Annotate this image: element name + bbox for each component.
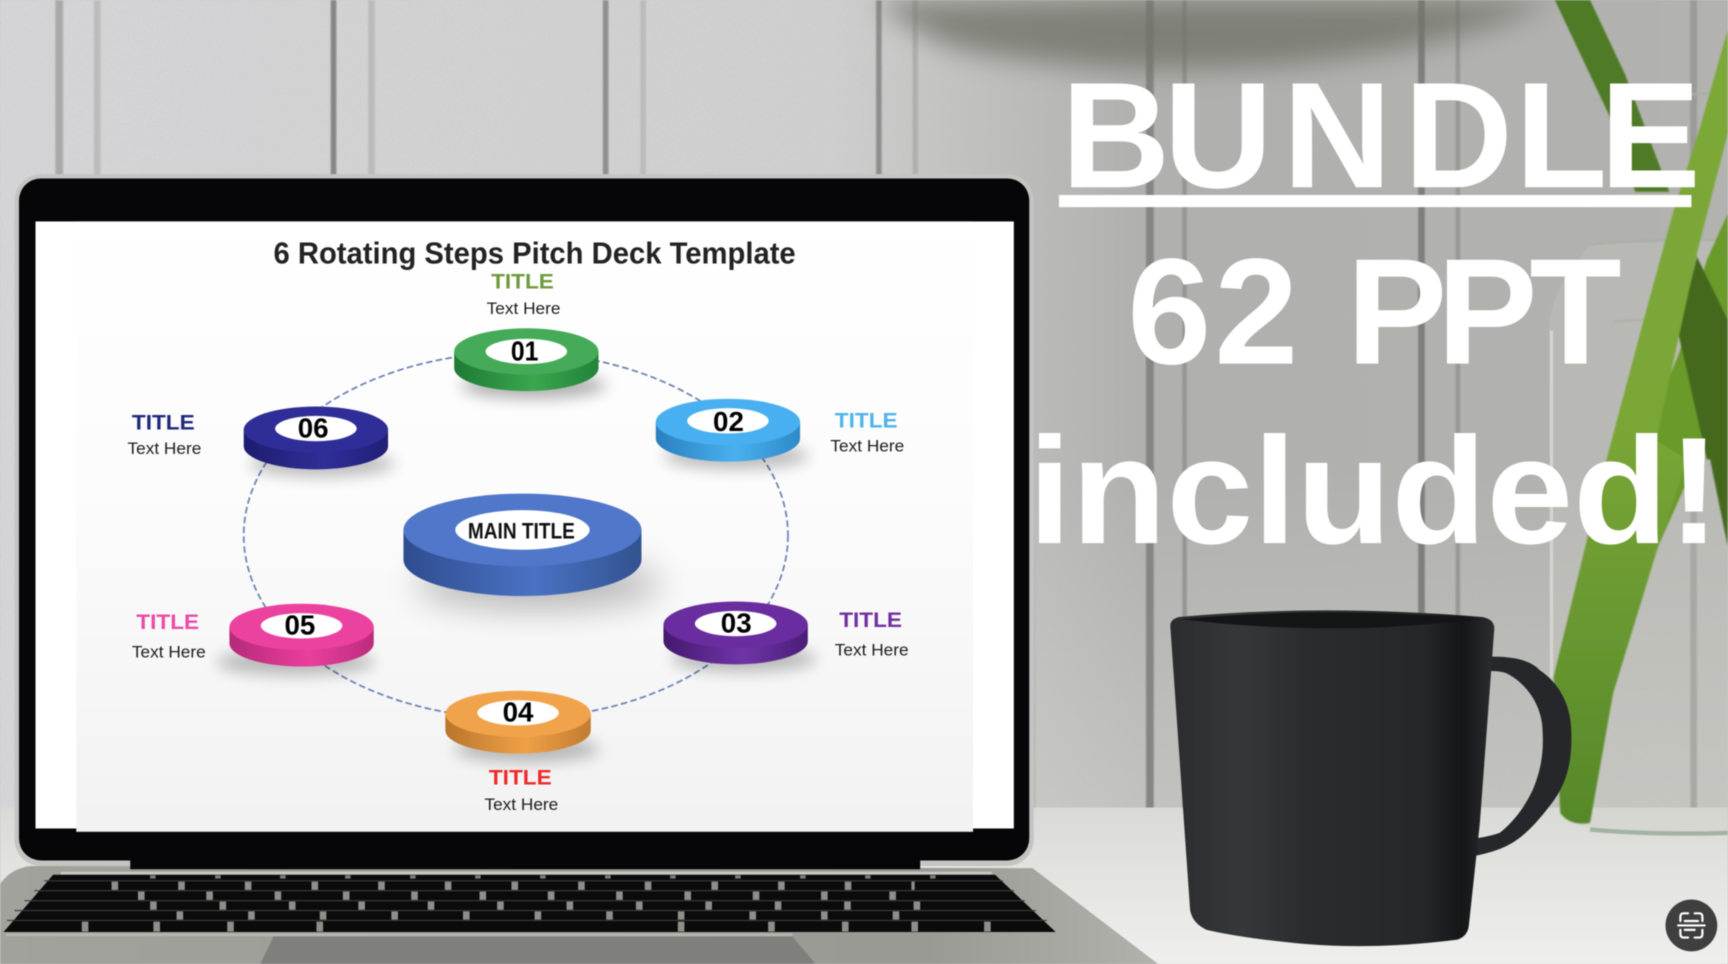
label: step 01 [487, 271, 560, 318]
step 03 disc: 03 [721, 607, 752, 638]
step 05 disc [216, 604, 375, 675]
table surface [0, 808, 1728, 964]
mug interior [1181, 613, 1482, 628]
main title disc [403, 494, 661, 608]
step 01 disc [454, 328, 606, 399]
label: step 03 [835, 609, 909, 660]
laptop base deck [0, 866, 1158, 964]
mug handle [1452, 657, 1571, 858]
step 06 disc: 06 [298, 412, 329, 443]
step 03 disc [663, 602, 817, 672]
laptop lid frame [15, 174, 1034, 866]
slide background [76, 221, 973, 832]
label: step 05 [132, 611, 206, 662]
icon: scan button [1665, 900, 1717, 951]
glass vase [1549, 93, 1728, 834]
step 06 disc [244, 407, 395, 477]
label: step 04 [484, 766, 558, 814]
laptop bezel [19, 178, 1029, 860]
label: step 01: TITLE [491, 271, 554, 294]
stem: dark upper leaf [1555, 0, 1669, 192]
headline: 62 PPT: 62 PPT [1127, 227, 1622, 396]
coffee mug [1170, 610, 1571, 946]
headline: included: included! [1028, 406, 1720, 576]
label: step 06: TITLE [132, 412, 195, 435]
label: step 06 [128, 412, 201, 458]
label: step 01: Text Here [487, 299, 560, 318]
stem: dark crossing leaf [1678, 257, 1728, 546]
label: step 02: TITLE [835, 409, 898, 432]
label: step 04: Text Here [484, 795, 558, 814]
label: step 03: Text Here [835, 641, 909, 660]
label: step 05: Text Here [132, 643, 206, 662]
headline: bundle: BUNDLE [1061, 50, 1701, 219]
hinge lower bezel [130, 848, 920, 869]
dashed ring [244, 353, 788, 718]
screen [36, 221, 1014, 828]
label: step 02 [830, 409, 904, 456]
label: step 04: TITLE [489, 766, 552, 789]
main title disc: MAIN TITLE [468, 519, 575, 544]
trackpad [260, 936, 816, 964]
step 04 disc [445, 691, 600, 762]
label: step 05: TITLE [136, 611, 199, 634]
step 04 disc: 04 [503, 697, 534, 728]
slide title: 6 Rotating Steps Pitch Deck Template [273, 235, 796, 270]
step 02 disc: 02 [713, 406, 744, 437]
mug body [1170, 610, 1494, 946]
leaf shadow on wall [876, 0, 1554, 69]
keyboard [4, 873, 1056, 935]
step 05 disc: 05 [284, 610, 315, 641]
label: step 06: Text Here [128, 439, 201, 458]
label: step 02: Text Here [830, 437, 904, 456]
stem: main leaf [1554, 30, 1728, 824]
label: step 03: TITLE [839, 609, 902, 632]
step 01 disc: 01 [511, 335, 538, 366]
stem: medium right leaf [1636, 214, 1728, 551]
green plant stems [1554, 0, 1728, 824]
laptop [0, 174, 1158, 964]
step 02 disc [656, 399, 809, 469]
